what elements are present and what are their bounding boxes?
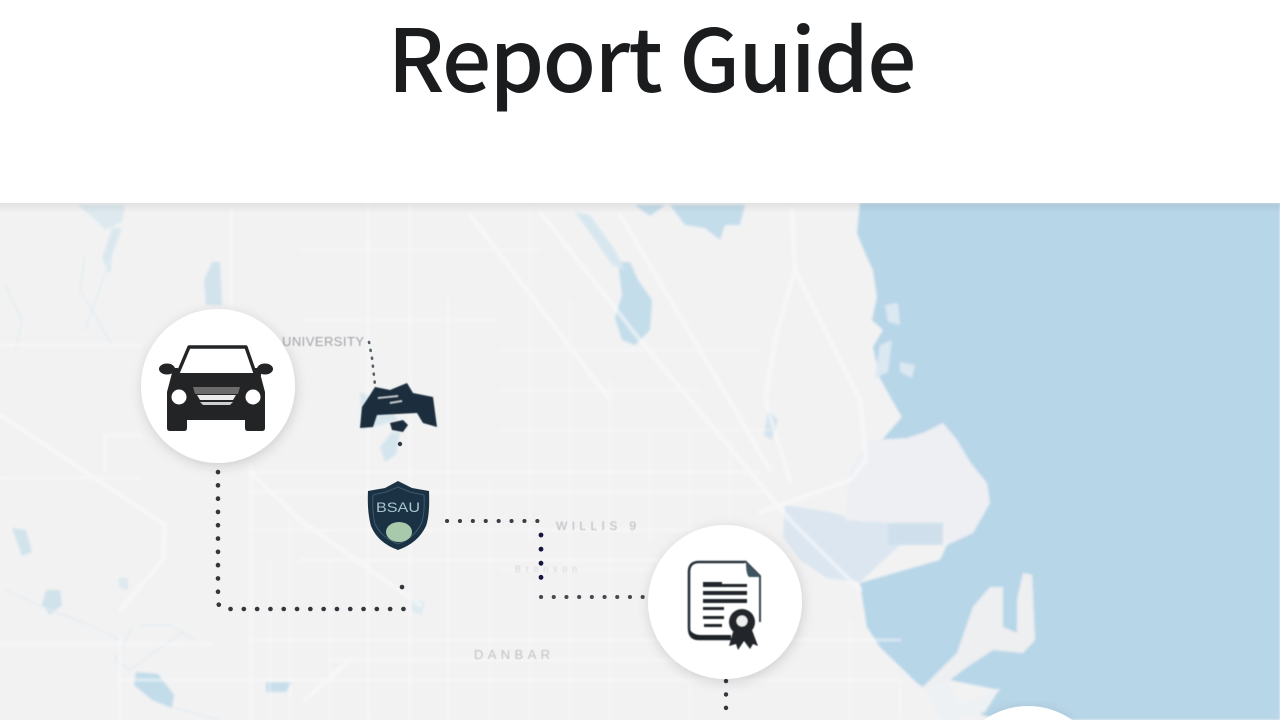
- map label: lower: DANBAR: [474, 647, 550, 662]
- map label: middle: WILLIS 9: [556, 519, 636, 533]
- map label: small: Bronson: [515, 564, 577, 574]
- map label: top: UNIVERSITY: [282, 334, 364, 349]
- route: dotted path from car to shield: [218, 472, 404, 609]
- shield emblem: [386, 522, 412, 542]
- marker: car: [141, 309, 295, 463]
- route: dotted path to damaged car: [369, 342, 375, 385]
- map water: bay and lake: [5, 203, 1280, 720]
- marker: certificate: [648, 525, 802, 679]
- icon: shield: [368, 481, 429, 550]
- small lakes and rivers: [12, 205, 778, 708]
- route: dotted path from shield to certificate: [447, 521, 648, 597]
- shield text: BSAU: [376, 499, 420, 515]
- icon: car: [159, 347, 273, 431]
- route: dotted path below certificate: [724, 681, 728, 718]
- marker: bottom circle: [984, 706, 1072, 720]
- map top shadow: [0, 203, 1280, 208]
- icon: certificate document: [689, 561, 761, 650]
- map roads: [134, 308, 902, 692]
- route: dot below damaged car: [398, 442, 402, 446]
- panel: map: [0, 203, 1280, 720]
- icon: rosette: [729, 630, 758, 650]
- icon: damaged car: [360, 383, 437, 432]
